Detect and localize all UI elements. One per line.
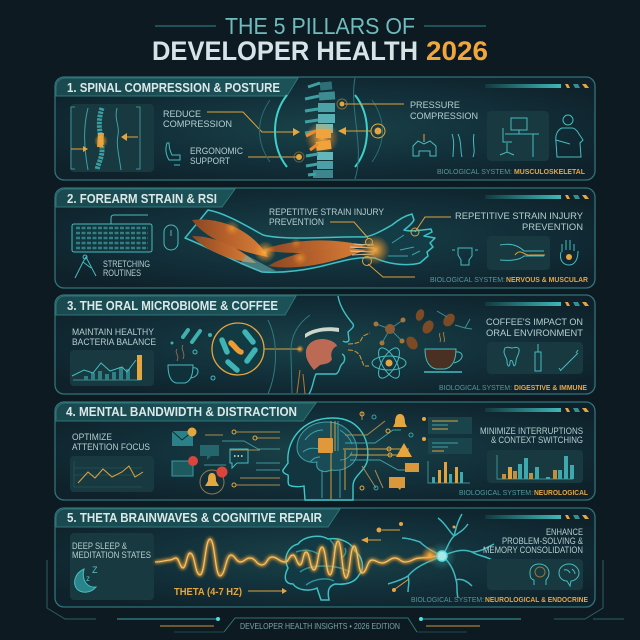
icon: keyboard bbox=[72, 215, 152, 252]
text: minimize bbox=[480, 426, 583, 445]
text: coffee impact: COFFEE'S IMPACT ON bbox=[486, 317, 583, 327]
text: ergonomic support: SUPPORT bbox=[190, 156, 230, 166]
text: coffee impact bbox=[486, 317, 584, 338]
icon: coffee beans bbox=[404, 308, 457, 352]
header: panel 3: 3. THE ORAL MICROBIOME & COFFEE bbox=[67, 298, 278, 313]
panel: theta brainwaves bbox=[55, 508, 595, 607]
card: brain icons bbox=[487, 559, 583, 590]
header deco bbox=[485, 515, 589, 519]
card: sleep: MEDITATION STATES bbox=[72, 550, 151, 560]
card: dental icons bbox=[487, 342, 583, 374]
illustration: bacteria circle bbox=[212, 323, 264, 375]
header: panel 1: 1. SPINAL COMPRESSION & POSTURE bbox=[67, 80, 280, 95]
illustration: head profile bbox=[268, 296, 353, 394]
icon: warning bbox=[396, 443, 412, 457]
icon: orange chat bbox=[389, 477, 405, 490]
illustration: brain head bbox=[283, 418, 368, 500]
card: hand nerve bbox=[487, 236, 550, 270]
bio label: BIOLOGICAL SYSTEM: bbox=[439, 383, 512, 392]
icon: bacteria field bbox=[170, 330, 215, 380]
text: theta label: THETA (4-7 HZ) bbox=[174, 586, 242, 598]
connector bbox=[264, 345, 304, 353]
illustration: arm bbox=[185, 210, 435, 272]
card: line chart bbox=[70, 456, 154, 492]
header deco bbox=[485, 408, 589, 412]
icon: compression bbox=[413, 134, 436, 156]
text: stretching bbox=[103, 259, 150, 278]
text: pressure compression: COMPRESSION bbox=[410, 111, 478, 121]
text: RSI right: REPETITIVE STRAIN INJURY bbox=[455, 211, 583, 221]
card: sleep: DEEP SLEEP & bbox=[72, 541, 127, 551]
footer frame bbox=[47, 560, 624, 632]
arrow: pressure bbox=[338, 124, 385, 138]
icon: moon: Z bbox=[92, 565, 98, 575]
arrow: reduce bbox=[207, 112, 300, 136]
squiggles bbox=[348, 333, 370, 366]
text: ergonomic support: ERGONOMIC bbox=[190, 146, 243, 156]
text: enhance: ENHANCE bbox=[546, 527, 583, 537]
callouts bbox=[330, 217, 451, 277]
title: THE 5 PILLARS OF bbox=[225, 13, 415, 39]
bio label: NEUROLOGICAL & ENDOCRINE bbox=[485, 595, 588, 604]
icon: orange envelope bbox=[405, 463, 419, 472]
bio label: BIOLOGICAL SYSTEM: bbox=[437, 167, 512, 176]
text: minimize: MINIMIZE INTERRUPTIONS bbox=[480, 426, 583, 436]
text: RSI center: PREVENTION bbox=[269, 217, 324, 227]
card: spine side view bbox=[70, 104, 154, 172]
text: bacteria bbox=[72, 327, 156, 347]
text: RSI center: REPETITIVE STRAIN INJURY bbox=[269, 207, 384, 217]
text: attention: ATTENTION FOCUS bbox=[72, 442, 150, 452]
illustration: brain bbox=[285, 536, 362, 600]
spine illustration bbox=[305, 81, 339, 178]
text: reduce compression bbox=[163, 109, 232, 129]
header: panel 2: 2. FOREARM STRAIN & RSI bbox=[67, 191, 217, 206]
header deco bbox=[485, 84, 589, 88]
icon: fist bbox=[452, 248, 478, 265]
text: enhance: MEMORY CONSOLIDATION bbox=[483, 545, 583, 555]
header deco bbox=[485, 195, 589, 199]
title bbox=[152, 13, 488, 66]
text: enhance bbox=[483, 527, 583, 555]
card: bar chart bbox=[487, 450, 583, 483]
icon: stretching bbox=[75, 255, 96, 278]
text: bacteria: BACTERIA BALANCE bbox=[72, 337, 156, 347]
icon: chat dots bbox=[230, 449, 248, 468]
text: theta label bbox=[174, 586, 287, 598]
molecule links bbox=[437, 311, 472, 329]
icon: chat bbox=[200, 445, 219, 460]
signal lines bbox=[204, 430, 280, 487]
arcs bbox=[260, 78, 382, 179]
icon: file alert bbox=[172, 456, 198, 476]
text: RSI right bbox=[455, 211, 583, 232]
text: RSI center bbox=[269, 207, 384, 227]
icon: mouse bbox=[164, 225, 178, 250]
text: attention: OPTIMIZE bbox=[72, 432, 112, 442]
illustration: neuron bbox=[388, 514, 494, 598]
panel: forearm bbox=[55, 188, 595, 288]
wave glow bbox=[226, 556, 296, 568]
text: bacteria: MAINTAIN HEALTHY bbox=[72, 327, 154, 337]
bio label bbox=[430, 275, 589, 284]
card: sleep bbox=[70, 533, 154, 600]
icon: orange bell bbox=[393, 414, 407, 427]
text: coffee impact: ORAL ENVIRONMENT bbox=[486, 328, 584, 338]
bio label: BIOLOGICAL SYSTEM: bbox=[430, 275, 505, 284]
icon: moon bbox=[75, 565, 98, 592]
icon: moon: z bbox=[86, 574, 90, 583]
icon: envelope alert bbox=[172, 428, 196, 446]
icon: hand bbox=[560, 240, 578, 265]
header deco bbox=[485, 302, 589, 306]
text: ergonomic support bbox=[190, 146, 243, 166]
text: pressure compression: PRESSURE bbox=[410, 100, 460, 110]
text: reduce compression: COMPRESSION bbox=[163, 119, 232, 129]
panel: spinal compression bbox=[55, 77, 595, 180]
line: ergonomic bbox=[248, 152, 304, 162]
title: 2026 bbox=[426, 36, 488, 66]
bio label: BIOLOGICAL SYSTEM: bbox=[459, 488, 533, 497]
bar chart small bbox=[428, 461, 470, 483]
mini cards bbox=[422, 417, 472, 454]
icon: bell bbox=[200, 466, 228, 494]
bio label: MUSCULOSKELETAL bbox=[514, 167, 585, 176]
callout dot bbox=[337, 99, 404, 109]
bio label: BIOLOGICAL SYSTEM: bbox=[411, 595, 484, 604]
text: RSI right: PREVENTION bbox=[522, 222, 583, 232]
theta wave bbox=[155, 539, 442, 578]
card: desk bbox=[487, 111, 549, 161]
icon: coffee cup bbox=[424, 332, 462, 372]
icon: chair bbox=[166, 143, 180, 165]
text: stretching: ROUTINES bbox=[103, 268, 141, 278]
bio label bbox=[411, 595, 588, 604]
card: chart bbox=[70, 350, 154, 386]
icon: molecule bbox=[374, 318, 406, 346]
bio label bbox=[437, 167, 585, 176]
icon: back bbox=[452, 134, 474, 157]
bio label bbox=[439, 383, 587, 392]
icon: cup bbox=[168, 345, 198, 383]
title: DEVELOPER HEALTH bbox=[152, 36, 418, 66]
neuron sparks bbox=[361, 522, 456, 592]
header: panel 4: 4. MENTAL BANDWIDTH & DISTRACTION bbox=[66, 404, 297, 419]
footer text: DEVELOPER HEALTH INSIGHTS • 2026 EDITION bbox=[240, 621, 400, 631]
circuits bbox=[343, 412, 413, 490]
text: attention bbox=[72, 432, 150, 452]
text: stretching: STRETCHING bbox=[103, 259, 150, 269]
panel: mental bandwidth bbox=[55, 402, 595, 500]
text: pressure compression bbox=[410, 100, 478, 121]
bio label bbox=[459, 488, 588, 497]
bio label: NERVOUS & MUSCULAR bbox=[506, 275, 589, 284]
panel: oral microbiome bbox=[55, 295, 595, 394]
bio label: DIGESTIVE & IMMUNE bbox=[514, 383, 587, 392]
text: minimize: & CONTEXT SWITCHING bbox=[491, 435, 583, 445]
text: enhance: PROBLEM-SOLVING & bbox=[502, 536, 583, 546]
icon: atom bbox=[372, 345, 406, 381]
header: panel 5: 5. THETA BRAINWAVES & COGNITIVE REPAIR bbox=[67, 510, 323, 525]
text: reduce compression: REDUCE bbox=[163, 109, 201, 119]
bio label: NEUROLOGICAL bbox=[534, 488, 588, 497]
icon: person bbox=[556, 115, 583, 157]
